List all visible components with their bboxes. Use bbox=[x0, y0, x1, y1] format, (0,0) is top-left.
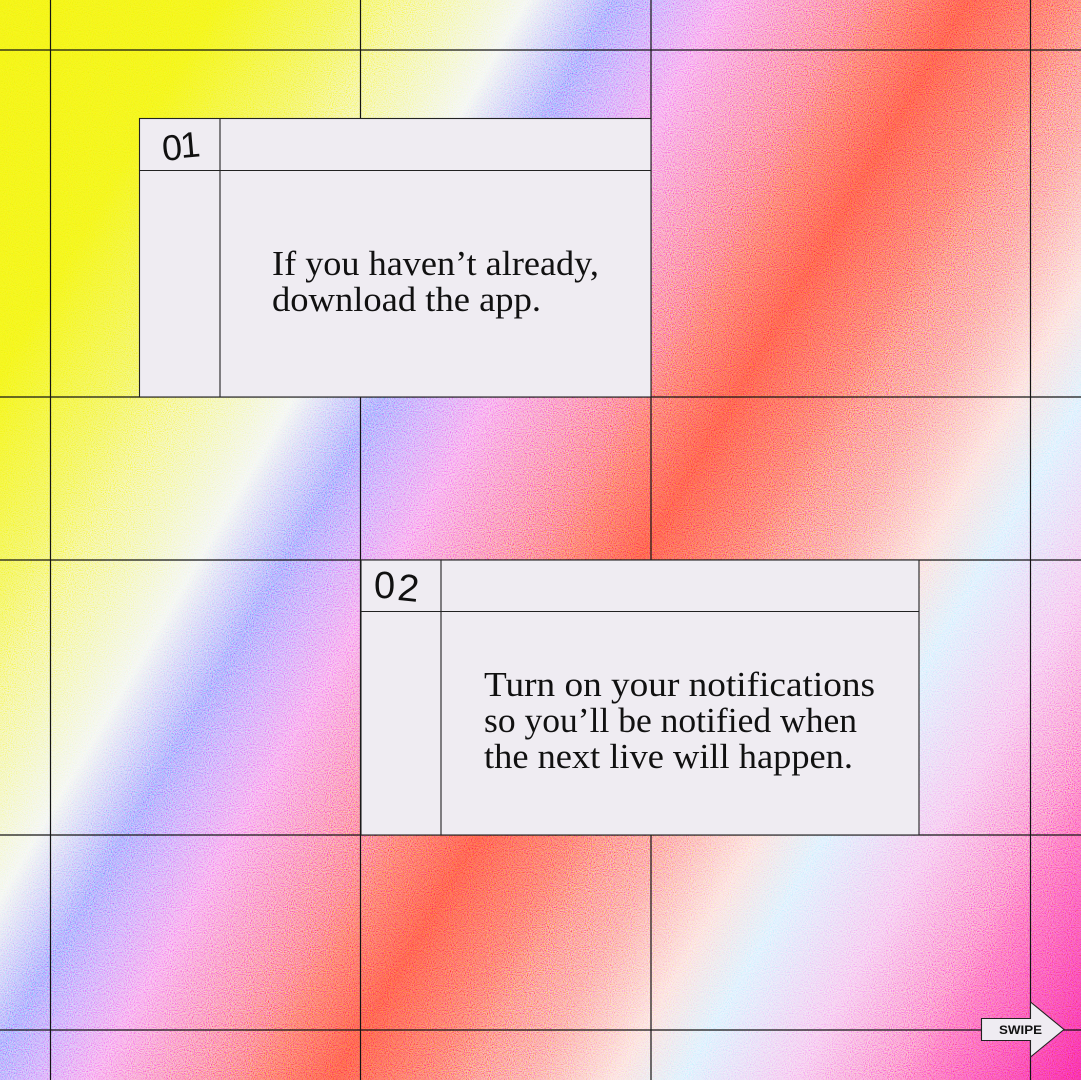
step 01 text: If you haven’t already, bbox=[272, 244, 599, 283]
step number 01: 0 bbox=[160, 126, 184, 169]
swipe arrow: SWIPE bbox=[999, 1023, 1042, 1037]
step 02 text: Turn on your notifications bbox=[484, 665, 875, 704]
step 02 text: the next live will happen. bbox=[484, 737, 853, 776]
swipe arrow bbox=[982, 1002, 1064, 1057]
panel: step 01 bbox=[140, 118, 651, 397]
panel 02 background bbox=[361, 560, 919, 835]
panel 01 background bbox=[140, 118, 651, 397]
step number 02: 0 bbox=[374, 565, 395, 607]
step number 02 bbox=[374, 565, 421, 611]
step number 02: 2 bbox=[396, 567, 421, 611]
step number 01: 1 bbox=[178, 123, 202, 166]
step number 01 bbox=[160, 123, 202, 169]
panel: step 02 bbox=[361, 560, 919, 835]
step 01 text: download the app. bbox=[272, 280, 541, 319]
step 02 text: so you’ll be notified when bbox=[484, 701, 857, 740]
